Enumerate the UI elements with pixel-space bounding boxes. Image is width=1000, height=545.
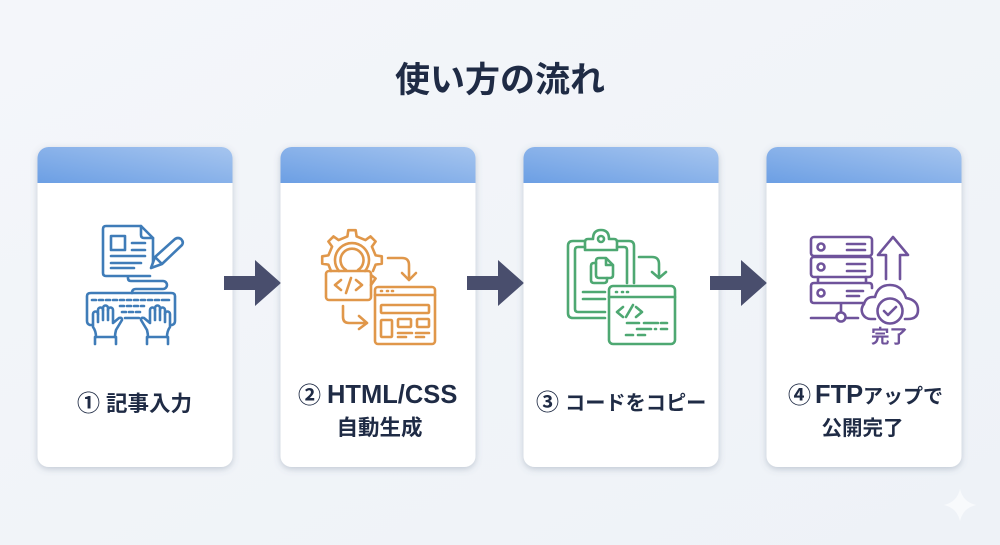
panel: step 2 — [280, 147, 476, 467]
panel: step 4: 公開完了 — [822, 417, 904, 440]
label: step 1: 記事入力 — [106, 392, 192, 416]
arrow 1 — [224, 260, 281, 306]
panel: step 2: 自動生成 — [336, 416, 423, 440]
label: step 2: HTML/CSS — [327, 381, 457, 409]
label: step 4: ④ — [788, 382, 811, 408]
icon: document, pencil and keyboard — [87, 226, 183, 344]
icon: sparkle — [944, 489, 976, 521]
arrow 2 — [467, 260, 524, 306]
label: step 3: コードをコピー — [565, 392, 706, 415]
label: step 4: アップで — [863, 385, 943, 408]
label: step 3: ③ — [536, 389, 559, 415]
icon: server, upload and cloud — [811, 237, 918, 324]
label: step 2: ② — [298, 382, 321, 408]
icon: gear, code and browser — [322, 230, 435, 344]
title: 使い方の流れ — [395, 61, 605, 100]
arrow 3 — [710, 260, 767, 306]
icon text: completed: 完了 — [871, 326, 908, 347]
panel: step 4 — [766, 147, 962, 467]
label: step 4: FTP — [815, 381, 863, 409]
panel: step 1 — [38, 147, 232, 467]
label: step 1: ① — [77, 390, 100, 416]
icon: clipboard and code window — [568, 230, 675, 344]
panel: step 3 — [524, 147, 718, 467]
